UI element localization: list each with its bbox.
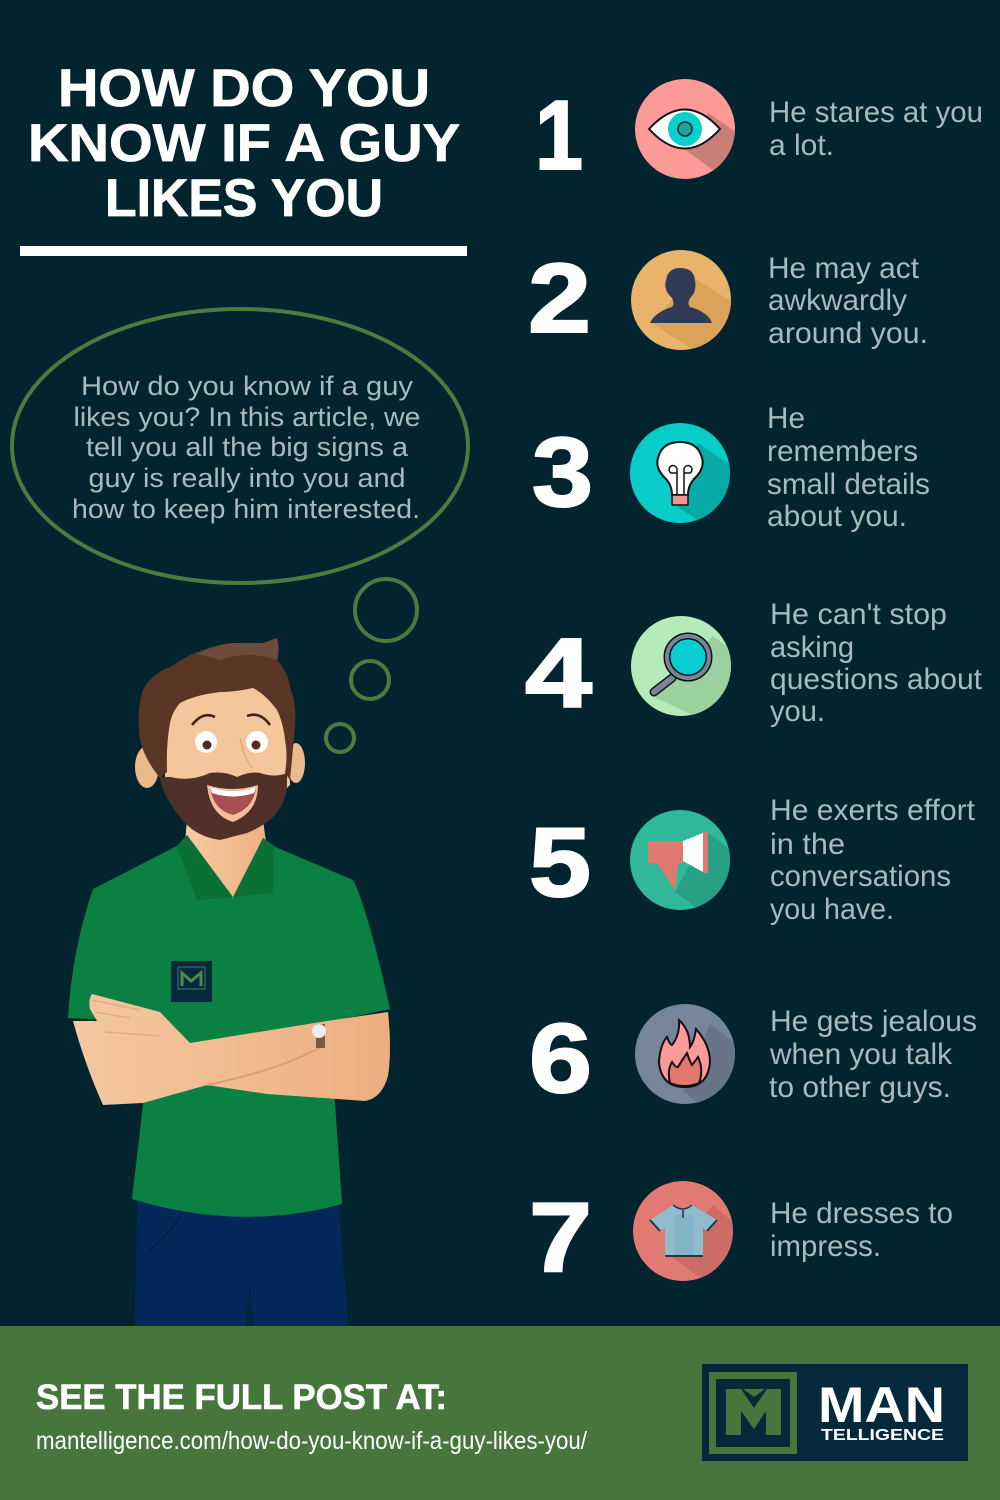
text: He gets jealous [770,1005,977,1038]
beard [160,772,287,840]
icon: magnifying glass [631,616,731,716]
text: impress. [770,1230,881,1263]
number 3: 3 [532,417,593,527]
number 5: 5 [529,807,591,917]
text [769,96,983,162]
eyes [192,715,270,753]
text [769,1005,977,1104]
icon: light bulb [630,423,730,523]
text [770,1197,953,1263]
crossed arms [73,994,390,1105]
text: you. [770,695,825,728]
hair [139,638,295,780]
item 2 [530,250,926,350]
text: remembers [767,435,918,468]
text: He can't stop [770,598,947,631]
ears [135,746,159,788]
text: a lot. [769,129,834,162]
intro text: guy is really into you and [88,463,406,493]
item 3 [533,408,929,532]
title underline [20,246,467,256]
icon: t-shirt [633,1181,733,1281]
text: He stares at you [769,96,983,129]
watch [312,1024,326,1048]
footer url: mantelligence.com/how-do-you-know-if-a-guy-likes-you/ [36,1427,587,1455]
shirt logo patch [171,961,212,1002]
number 1: 1 [535,80,583,190]
text: He exerts effort [770,794,976,827]
mouth [207,785,258,822]
item 1 [540,79,981,179]
text [770,794,976,926]
intro text: How do you know if a guy [81,371,414,401]
intro text: tell you all the big signs a [86,432,409,462]
text: He dresses to [770,1197,953,1230]
item 5 [531,798,975,925]
text: small details [767,468,930,501]
text: about you. [767,500,907,533]
text: in the [770,828,845,861]
shirt [68,835,390,1217]
icon: eye [635,79,735,179]
item 6 [532,1004,976,1104]
logo: TELLIGENCE [821,1427,944,1444]
text [768,252,928,350]
character: smiling bearded man [68,638,390,1326]
icon: megaphone [630,810,730,910]
icon: flame [635,1004,735,1104]
number 6: 6 [529,1003,592,1113]
title [28,59,460,228]
intro text [72,371,420,524]
footer heading: SEE THE FULL POST AT: [36,1378,447,1417]
neck [185,820,266,900]
intro text: likes you? In this article, we [74,402,420,432]
number 7: 7 [529,1182,592,1292]
logo: MAN [818,1377,945,1433]
thought bubble [12,309,468,752]
intro text: how to keep him interested. [72,494,420,524]
text [767,402,930,533]
number 2: 2 [528,243,591,353]
item 4 [526,604,982,727]
text: He may act [768,252,920,285]
text: when you talk [769,1038,953,1071]
footer band [0,1326,1000,1500]
head [165,680,290,830]
pants [135,1190,348,1326]
title: HOW DO YOU [58,59,430,118]
text: conversations [770,860,951,893]
title: LIKES YOU [105,169,383,228]
text: you have. [770,893,894,926]
title: KNOW IF A GUY [28,114,460,173]
text: awkwardly [768,284,907,317]
item 7 [532,1181,952,1281]
text: around you. [768,317,928,350]
text: questions about [770,663,983,696]
text: He [767,402,805,435]
text: to other guys. [769,1071,951,1104]
text: asking [770,631,854,664]
text [770,598,983,728]
number 4: 4 [525,618,592,728]
collar [177,835,233,900]
logo [702,1364,968,1461]
icon: person [631,250,731,350]
